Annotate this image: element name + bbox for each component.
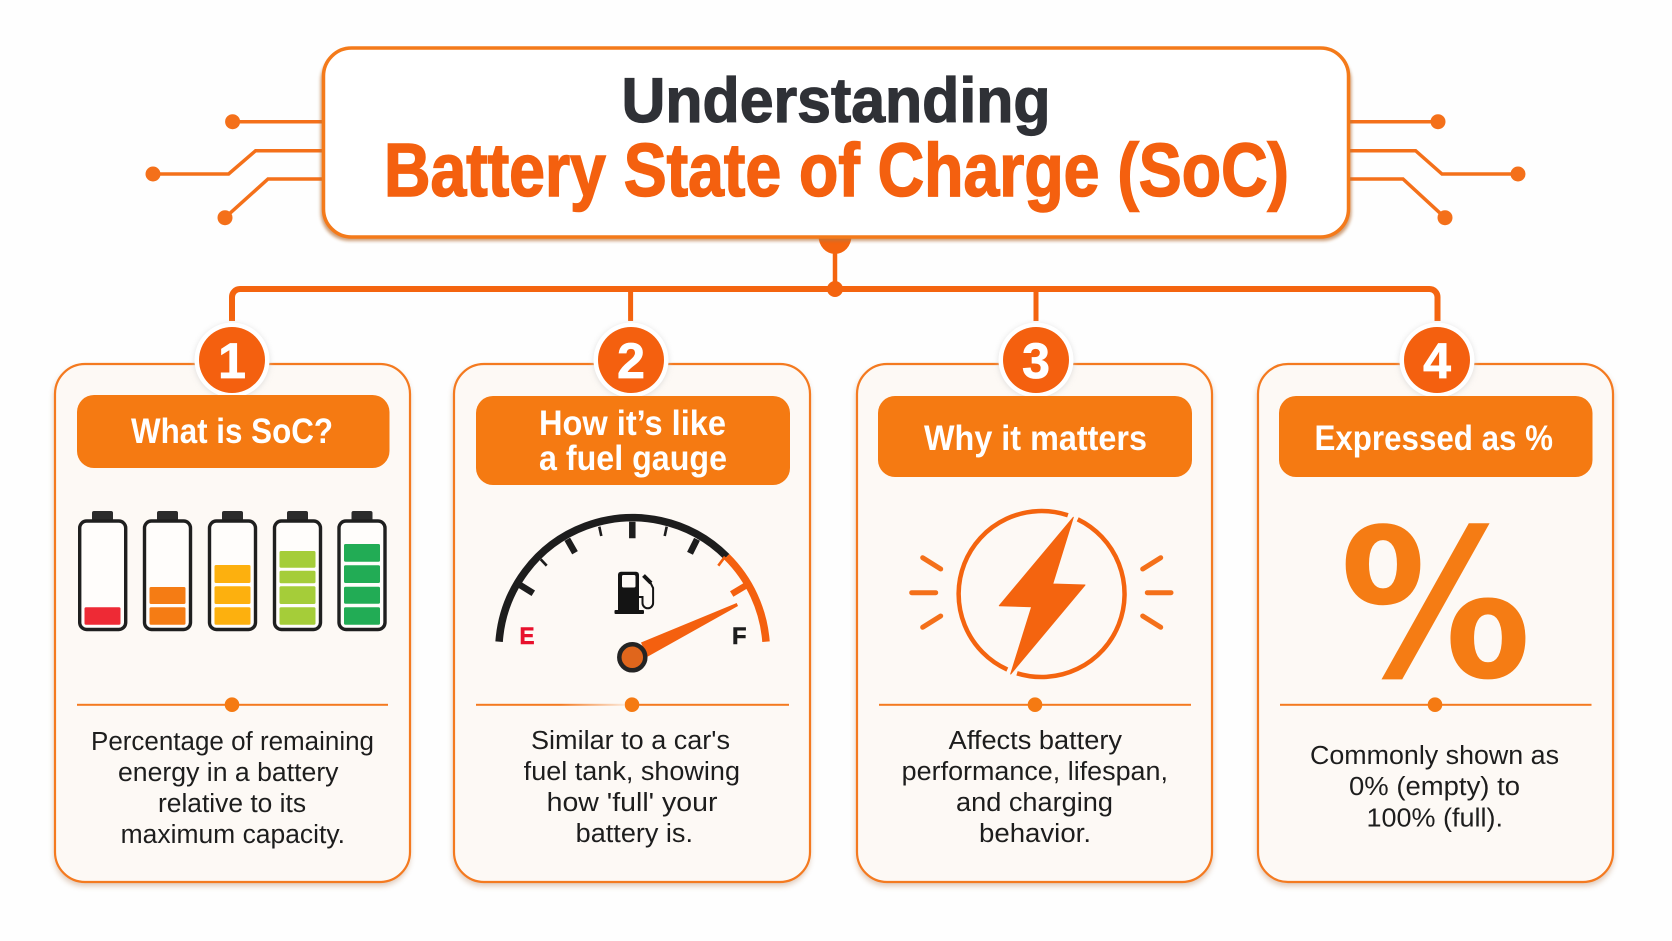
battery full bbox=[339, 511, 385, 630]
header 2: a fuel gauge bbox=[539, 439, 727, 478]
header 1: What is SoC? bbox=[131, 412, 333, 451]
description 2: how 'full' your bbox=[547, 789, 718, 817]
panel 3: why it matters bbox=[856, 322, 1213, 886]
description 3: Affects battery bbox=[949, 727, 1122, 755]
description 4 bbox=[1310, 742, 1559, 832]
description 2 bbox=[524, 727, 740, 848]
right circuit traces bbox=[1349, 114, 1526, 225]
panel 1: What is SoC bbox=[54, 322, 410, 886]
gauge E label: E bbox=[520, 623, 534, 650]
description 3: behavior. bbox=[979, 820, 1091, 848]
lightning icon bbox=[912, 511, 1171, 677]
battery low bbox=[144, 511, 190, 630]
description 4: Commonly shown as bbox=[1310, 742, 1559, 770]
number badge 2 bbox=[594, 322, 668, 398]
description 3: performance, lifespan, bbox=[902, 758, 1168, 786]
connector tree bbox=[232, 236, 1438, 321]
fuel gauge icon bbox=[499, 518, 766, 670]
description 2: Similar to a car's bbox=[531, 727, 730, 755]
number badge 4: 4 bbox=[1423, 333, 1451, 389]
battery empty bbox=[80, 511, 126, 630]
description 1: Percentage of remaining bbox=[91, 728, 374, 756]
description 2: fuel tank, showing bbox=[524, 758, 740, 786]
title box bbox=[320, 48, 1352, 241]
header 1 bbox=[77, 395, 390, 468]
number badge 3: 3 bbox=[1022, 333, 1050, 389]
header 4: Expressed as % bbox=[1314, 419, 1553, 458]
number badge 1 bbox=[194, 322, 270, 398]
header 2: How it’s like bbox=[539, 404, 726, 443]
description 1: relative to its bbox=[158, 790, 306, 818]
description 3: and charging bbox=[956, 789, 1113, 817]
description 3 bbox=[902, 727, 1168, 848]
divider 2 bbox=[476, 697, 789, 712]
battery icons bbox=[80, 511, 385, 630]
description 2: battery is. bbox=[576, 820, 693, 848]
fuel pump icon bbox=[614, 572, 653, 614]
description 1 bbox=[91, 728, 374, 849]
description 1: energy in a battery bbox=[118, 759, 339, 787]
description 1: maximum capacity. bbox=[121, 821, 345, 849]
header 2 bbox=[476, 396, 790, 485]
gauge needle bbox=[619, 603, 738, 670]
title line 2: Battery State of Charge (SoC) bbox=[384, 128, 1289, 212]
divider 4 bbox=[1280, 697, 1592, 712]
number badge 2: 2 bbox=[617, 333, 645, 389]
description 4: 100% (full). bbox=[1366, 804, 1503, 832]
panel 4: expressed as percent bbox=[1257, 322, 1614, 886]
number badge 4 bbox=[1400, 322, 1474, 398]
divider 3 bbox=[879, 697, 1191, 712]
panel 2: fuel gauge bbox=[453, 322, 810, 886]
number badge 1: 1 bbox=[218, 333, 246, 389]
percent symbol: % bbox=[1340, 484, 1532, 726]
left circuit traces bbox=[146, 114, 323, 225]
header 4 bbox=[1279, 396, 1592, 477]
description 4: 0% (empty) to bbox=[1349, 773, 1520, 801]
gauge F label: F bbox=[732, 623, 746, 650]
header 3: Why it matters bbox=[924, 419, 1147, 458]
battery high bbox=[274, 511, 320, 630]
number badge 3 bbox=[998, 322, 1074, 398]
title line 1: Understanding bbox=[622, 66, 1050, 136]
battery medium bbox=[210, 511, 256, 630]
header 3 bbox=[878, 396, 1192, 477]
divider 1 bbox=[77, 697, 388, 712]
